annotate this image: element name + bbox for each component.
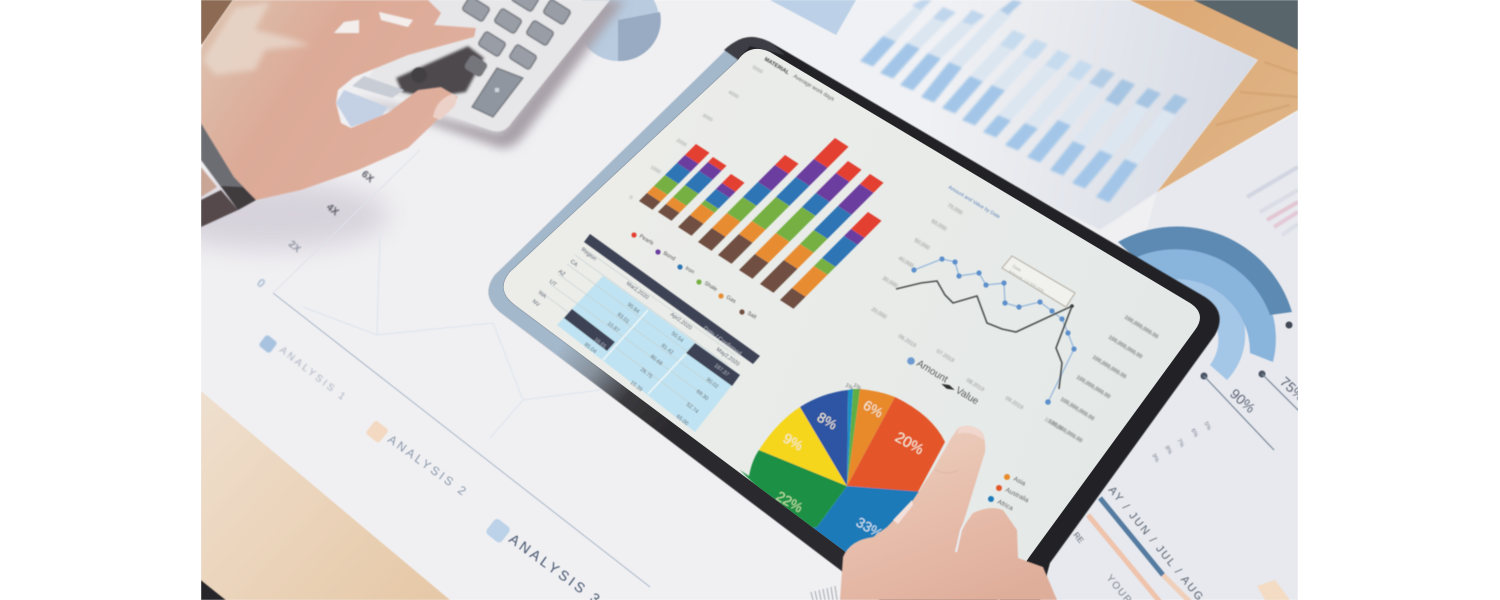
semi-circle gauge chart [1118,226,1292,380]
bar chart on the paper sheet [860,0,1188,202]
hand highlight [203,2,310,75]
pie labels: 20% [892,429,927,458]
line chart axis labels: 20,000 [870,307,887,321]
bar 1 [639,144,710,210]
pie labels: 6% [860,397,886,421]
legend: analysis 1 [258,334,345,400]
screen heading: Average work days [792,74,835,103]
tablet screen [504,48,1200,600]
gauge callout: 75%: 75% [1277,373,1309,404]
wood desk top right [1130,0,1298,192]
thumb nail [893,500,913,524]
horizontal bars top right [1247,167,1298,235]
table labels: WA [537,290,548,300]
table labels: 90.84 [626,302,640,315]
line chart axis labels: 07.2019 [935,349,955,364]
table labels: NV [531,299,541,308]
right hand pointing at tablet [840,426,1057,600]
pie labels: 33% [854,514,886,542]
table labels: Mar2,2020 [625,281,650,301]
blue pie behind calculator [577,0,856,61]
wood desk bottom left [201,0,450,600]
stacked bar chart y axis: 1000 [649,165,662,176]
line chart axis labels [870,203,1063,432]
pie slice: yellow [759,407,847,486]
bar 8 [780,212,882,309]
stacked bar chart y axis: 2000 [675,138,688,149]
table labels: 81.42 [660,343,674,356]
table labels: May2,2020 [715,347,740,368]
paper axis labels [254,169,376,291]
line chart right axis labels: 100,000,000.00 [1107,335,1143,360]
line chart axis labels: 09.2019 [1004,396,1024,411]
bar 4 [698,155,798,251]
table labels: 50.54 [670,331,684,344]
stacked bar chart y axis: 0 [628,195,634,201]
pie slice: thin green [847,389,860,486]
pie slice: blue [800,486,925,560]
line chart axis labels: 30,000 [881,276,898,290]
table labels: 10.87 [606,321,620,334]
line chart right axis labels [1047,315,1159,444]
pie labels: 8% [814,409,840,433]
pie slice: navy [800,390,848,486]
paper axis labels: 4X [324,202,341,218]
stacked bar chart y axis [628,65,764,201]
table labels: Region [580,247,597,262]
solid bars [860,36,1138,202]
wrist band [201,123,256,210]
pie labels: 9% [780,430,806,454]
line chart legend: Amount [914,358,950,385]
table labels: 26.75 [639,367,653,380]
table row lines [545,247,735,407]
table labels: 16.01 [593,337,607,350]
pie slice: green [740,450,847,530]
table labels: 80.68 [649,354,663,367]
line chart axis labels: 60,000 [930,219,947,233]
hand gap behind fingers [336,90,388,127]
line chart tooltip: Date [1011,264,1023,273]
small percentages on timeline paper [1150,421,1212,464]
line chart axis labels: 08.2019 [965,378,985,393]
fingernail [958,426,984,440]
pie chart: 1% [844,383,854,392]
calculator shadow [350,0,625,148]
bar 5 [718,138,848,264]
line chart right axis labels: 100,000,000.00 [1091,355,1127,380]
small percentages on timeline paper: 6% [1189,428,1199,439]
left hand on calculator [201,0,476,227]
line chart legend [907,357,981,408]
line chart legend: Value [953,385,981,408]
bar 7 [760,174,884,293]
stacked bar chart legend: Shale [703,281,718,293]
tablet bezel [489,37,1220,600]
gauge callout: 90%: 90% [1227,385,1259,416]
stacked bar chart y axis: 5000 [751,65,764,76]
table labels [531,247,740,427]
paper axis labels: 0 [254,276,268,291]
paper sheet chart: faint axes [273,150,650,587]
thumb nail [433,94,457,120]
finger separation [956,522,965,552]
line chart axis labels: 70,000 [946,203,963,217]
stacked bar chart legend: Salt [746,311,758,321]
paper axis labels: 2X [286,239,303,255]
hand shape [201,0,476,200]
bar 3 [678,174,744,236]
table cell fill [557,276,740,432]
line chart: value series [896,281,1074,389]
line chart right axis labels: 100,000,000.00 [1075,375,1111,400]
bar caps [912,0,1188,114]
calculator keys [462,0,571,117]
line chart tooltip: Amount: 14,000,000 [1007,269,1045,294]
table labels: UT [548,279,558,288]
tablet [480,30,1240,600]
table labels: 85.04 [583,342,597,355]
hand shape [840,426,1057,600]
legend: analysis 1: ANALYSIS 1 [277,345,349,404]
paper axis labels: 6X [359,169,376,185]
legend: analysis 2 [366,420,466,496]
pie chart: 1% [852,383,862,392]
line chart right axis labels: 100,000,000.00 [1059,397,1095,422]
small percentages on timeline paper: 9% [1150,453,1160,464]
data table [531,234,760,432]
table labels: 83.01 [616,312,630,325]
stacked bar chart y axis: 4000 [727,90,740,101]
line chart axis labels: 10.2019 [1043,417,1063,432]
legend: analysis 3 [485,517,606,600]
screen heading: MATERIAL [763,57,791,76]
data table: Date / Confirmed [702,326,742,357]
screen heading [763,57,835,103]
line chart tooltip [1002,256,1075,307]
pie legend: Australia [1004,487,1030,504]
table labels: 69.30 [695,389,709,402]
line chart title: Amount and Value by Date [947,185,1001,220]
pie legend: Asia [1012,476,1027,488]
line chart: amount series [911,256,1077,405]
dark keys under fingers [396,46,484,98]
stacked bar chart legend: Gas [725,295,737,305]
table labels: 65.00 [675,414,689,427]
line chart right axis labels: 100,000,000.00 [1123,315,1159,340]
pie slice: thin blue [847,389,853,486]
table labels: CA [569,259,579,268]
gauge callout: 75% [1258,320,1298,412]
bar 2 [658,157,726,221]
line chart axis labels: 40,000 [897,256,914,270]
line chart axis labels: 50,000 [913,238,930,252]
gauge callout: 90% [1200,372,1274,450]
background paper sheets [150,0,1298,600]
pie slice: red [847,397,945,492]
stacked bar chart [639,138,884,309]
small percentages on timeline paper: 8% [1163,445,1173,456]
table labels: 52.74 [685,402,699,415]
table labels: AZ [557,269,567,278]
table labels: 187.37 [713,363,730,378]
bar 6 [739,161,862,279]
table hatch at bottom [811,586,837,600]
table highlighted cells [564,309,615,351]
stacked bar chart legend: Iron [684,266,695,276]
table header [584,234,760,364]
pie slice: orange [847,389,895,486]
pale bar tracks [884,6,1172,160]
gaps between fingers [334,20,359,33]
timeline paper bottom right: RE [1071,531,1085,545]
pie legend [988,474,1030,512]
photo: tablet dashboard on desk [201,0,1298,600]
pie labels [774,397,927,542]
stacked bar chart y axis: 3000 [701,113,714,124]
small percentages on timeline paper: 7% [1175,438,1185,449]
pie legend: Africa [996,499,1014,512]
line chart axis labels: 06.2019 [897,334,917,349]
legend: analysis 2: ANALYSIS 2 [385,432,471,500]
small percentages on timeline paper: 5% [1202,421,1212,432]
timeline paper bottom right [1071,484,1290,600]
pie chart [740,383,945,560]
stacked bar chart legend [631,232,758,321]
calculator [350,0,625,148]
pie labels: 22% [774,488,806,516]
table labels: 15.39 [629,380,643,393]
table labels: 90.02 [705,377,719,390]
stacked bar chart legend: Bond [662,251,676,262]
line chart right axis labels: 100,000,000.00 [1047,419,1083,444]
table labels: Apr2,2020 [669,312,693,332]
stacked bar chart legend: Pearls [638,234,655,247]
calculator body [364,0,610,131]
